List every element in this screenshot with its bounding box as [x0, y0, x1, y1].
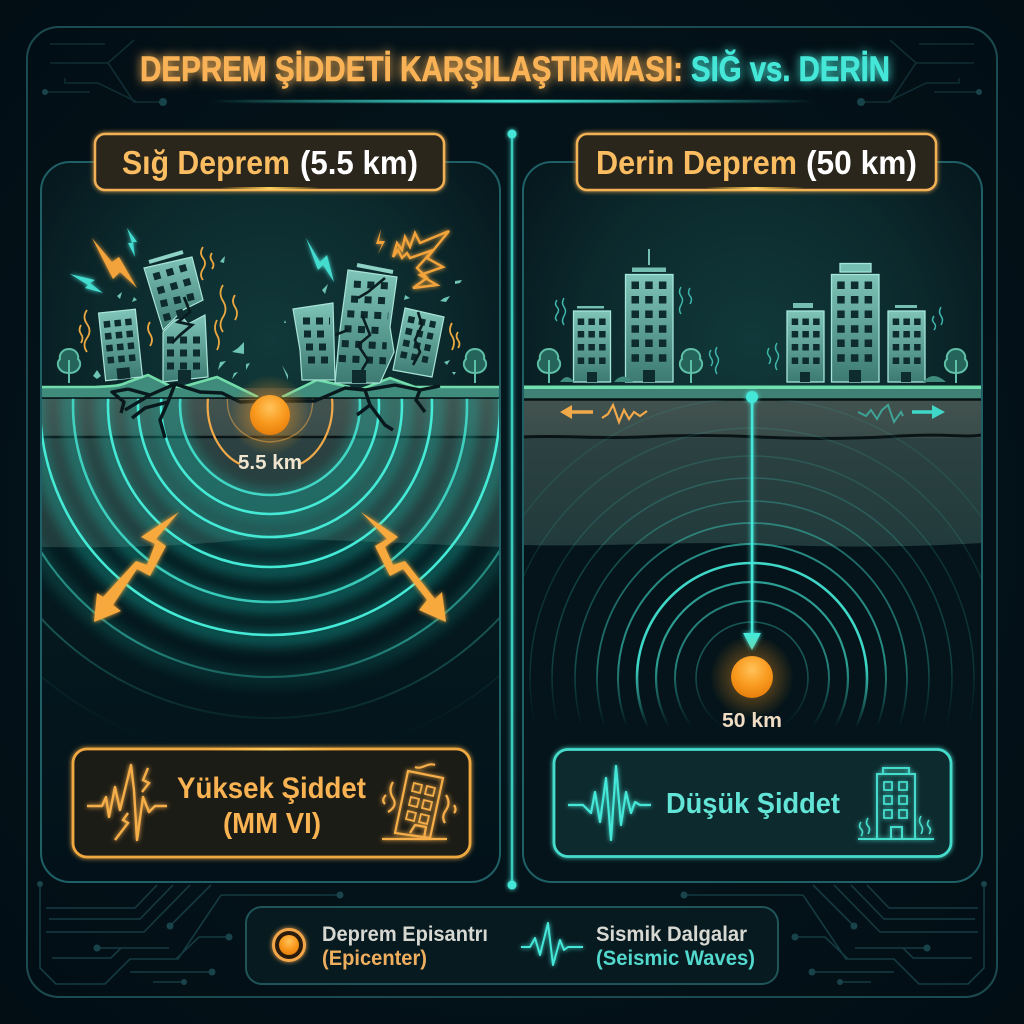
panel: deep earthquake [246, 134, 1024, 984]
ground surface [523, 386, 982, 389]
damaged buildings left [99, 252, 208, 382]
building 4 [832, 264, 879, 382]
legend text: epicenter: (Epicenter) [322, 947, 427, 970]
building: right leaning [393, 308, 444, 377]
soil layers [42, 388, 499, 548]
arrow: right energy bolt [361, 512, 446, 622]
text: low intensity: Düşük Şiddet [666, 788, 840, 820]
icon: epicenter key [274, 930, 304, 960]
sky [41, 162, 500, 392]
shallow label: 5.5 km [238, 452, 302, 474]
icon: stable building [858, 768, 934, 839]
panel heading: shallow: Sığ Deprem [122, 144, 290, 181]
panel heading: deep [577, 134, 936, 190]
building 1 [574, 306, 610, 382]
legend text: waves: Sismik Dalgalar [596, 923, 747, 946]
seismic waves deep [524, 400, 981, 726]
title: DEPREM ŞİDDETİ KARŞILAŞTIRMASI: [140, 50, 683, 89]
legend text: epicenter [322, 923, 488, 970]
title underline [210, 100, 814, 102]
epicenter: deep [712, 638, 792, 716]
icon: mild seismogram [568, 766, 651, 840]
icon: tilted building [382, 764, 456, 839]
building 2 [626, 249, 673, 382]
lightning bolts above city [70, 228, 449, 293]
surface wave left [560, 405, 647, 422]
building 3 [787, 303, 824, 382]
arrow: left energy bolt [94, 512, 179, 622]
icon: wave key [521, 923, 583, 965]
legend text: epicenter: Deprem Episantrı [322, 923, 488, 946]
building: right small [293, 303, 335, 380]
ground cracks [41, 384, 500, 438]
teal vibration lines [556, 287, 942, 374]
text: high intensity: Yüksek Şiddet [177, 772, 366, 805]
orange near-field rings [208, 392, 332, 464]
surface wave right [858, 405, 945, 422]
sky [523, 162, 982, 388]
callout: low intensity [554, 750, 951, 856]
building: left tall cracked [144, 252, 208, 382]
debris [93, 256, 462, 380]
trees left panel [58, 349, 486, 383]
title: SIĞ vs. DERİN [691, 49, 890, 89]
seismic waves [42, 398, 499, 719]
building: right tall cracked [335, 265, 397, 383]
soil layers [524, 389, 981, 546]
text: high intensity [177, 772, 366, 840]
panel heading: deep: Derin Deprem [596, 144, 797, 181]
legend [246, 907, 778, 984]
building 5 [888, 305, 925, 382]
cracked ground surface [41, 375, 500, 398]
damaged buildings right [293, 265, 444, 383]
callout: high intensity [73, 748, 470, 857]
center divider [508, 130, 516, 890]
orange shaking lines left panel [80, 247, 460, 352]
panel: shallow earthquake [40, 128, 983, 985]
building: left small [99, 309, 142, 381]
intact buildings [574, 249, 925, 382]
epicenter: shallow [232, 377, 308, 452]
deep label: 50 km [722, 710, 782, 732]
panel heading: deep: (50 km) [806, 144, 917, 181]
icon: violent seismogram [87, 765, 167, 840]
panel heading: shallow: (5.5 km) [300, 144, 418, 181]
panel heading: shallow [95, 134, 444, 190]
text: high intensity: (MM VI) [223, 808, 321, 840]
depth arrow [743, 391, 761, 650]
legend text: waves: (Seismic Waves) [596, 947, 755, 970]
legend text: waves [596, 923, 755, 970]
trees and bushes [538, 349, 967, 383]
